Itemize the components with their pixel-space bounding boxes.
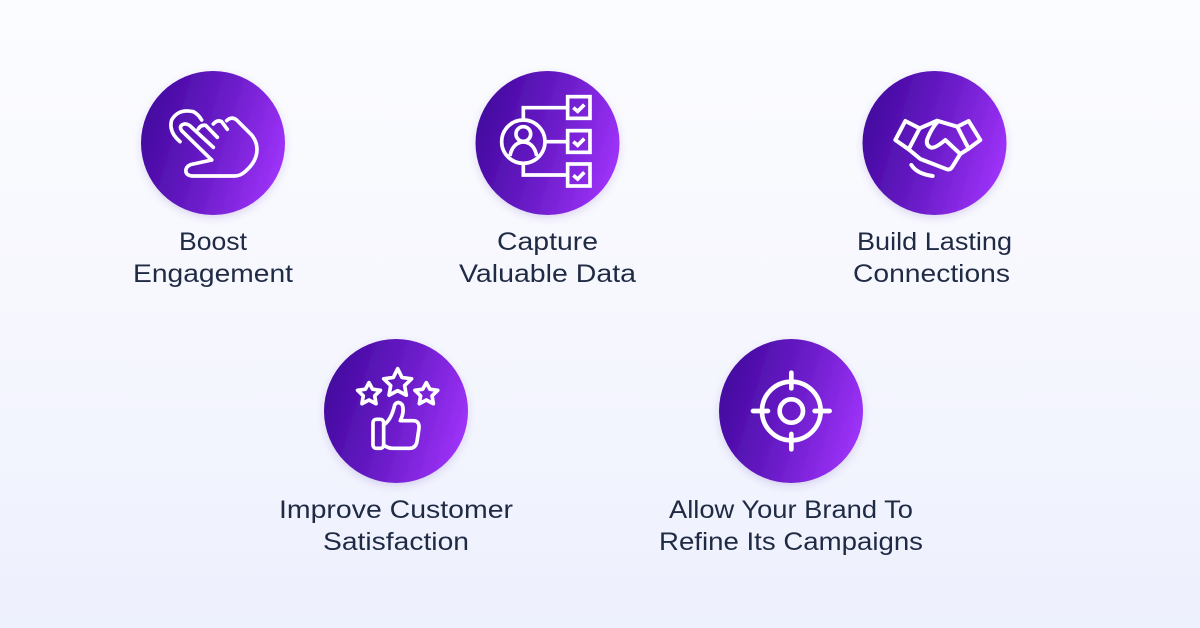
label: Build Lasting Connections: Connections [853, 260, 1010, 288]
label: Improve Customer Satisfaction: Improve Customer [279, 496, 513, 524]
item: Build Lasting Connections [853, 71, 1012, 288]
label: Improve Customer Satisfaction: Satisfaction [323, 528, 469, 556]
label: Improve Customer Satisfaction [279, 496, 513, 556]
icon circle: stars and thumbs up [324, 339, 468, 483]
label: Boost Engagement: Boost [179, 228, 247, 256]
item: Improve Customer Satisfaction [279, 339, 513, 556]
icon circle: handshake [862, 71, 1006, 215]
item: Capture Valuable Data [459, 71, 636, 288]
label: Boost Engagement [133, 228, 293, 288]
label: Allow Your Brand To Refine Its Campaigns: Allow Your Brand To [669, 496, 913, 524]
item: Allow Your Brand To Refine Its Campaigns [659, 339, 923, 556]
label: Build Lasting Connections: Build Lasting [857, 228, 1012, 256]
icon circle: person with checklist [476, 71, 620, 215]
label: Allow Your Brand To Refine Its Campaigns: Refine Its Campaigns [659, 528, 923, 556]
label: Capture Valuable Data: Capture [497, 228, 598, 256]
icon circle: tapping hand [141, 71, 285, 215]
label: Capture Valuable Data [459, 228, 636, 288]
label: Boost Engagement: Engagement [133, 260, 293, 288]
label: Capture Valuable Data: Valuable Data [459, 260, 636, 288]
label: Build Lasting Connections [853, 228, 1012, 288]
icon circle: target crosshair [719, 339, 863, 483]
label: Allow Your Brand To Refine Its Campaigns [659, 496, 923, 556]
item: Boost Engagement [133, 71, 293, 288]
